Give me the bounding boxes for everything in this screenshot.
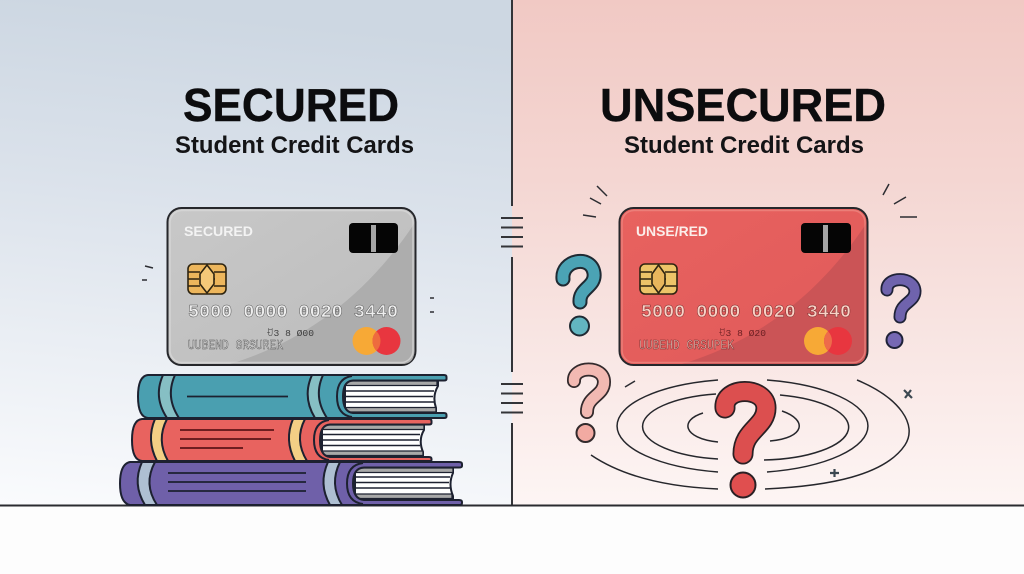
icon: pink question mark [574,370,604,442]
ground line [0,504,1024,506]
book stack [120,375,462,505]
heading: unsecured: UNSECURED [600,79,886,131]
card number: 5000 0000 0020 3440 [641,303,851,323]
heading: unsecured [600,79,886,159]
cardholder: UUBEND GRSUREK [188,338,283,354]
card number: 5000 0000 0020 3440 [188,303,398,323]
unsecured side motion ticks [583,184,917,387]
card shine [230,224,414,364]
heading: secured: Student Credit Cards [175,132,414,159]
panel: secured background [0,0,512,505]
book: teal [138,375,446,418]
magnetic block [349,223,398,253]
heading: secured [175,79,414,159]
expiry: ꀀ3 8 Ø20 [718,327,766,339]
expiry: ꀀ3 8 Ø00 [266,327,314,339]
cardholder: UUBEHD GRSUPEK [639,338,734,354]
secured credit card [168,208,416,365]
book: red [132,419,432,461]
network logo [352,327,400,355]
card shine [682,224,866,364]
center divider [501,0,523,505]
sparkles [830,390,912,477]
card label: SECURED [184,223,253,239]
panel: unsecured background [512,0,1024,505]
icon: purple question mark [886,280,915,348]
network logo [804,327,852,355]
icon: large red question mark [725,392,766,498]
chip [188,264,226,294]
book: purple [120,462,462,505]
heading: secured: SECURED [183,79,399,131]
icon: teal question mark [563,261,594,336]
footer strip [0,506,1024,574]
magnetic block [801,223,851,253]
card label: UNSE/RED [636,223,708,239]
heading: unsecured: Student Credit Cards [624,132,864,159]
secured side motion ticks [142,266,434,312]
chip [640,264,677,294]
concentric rings [591,380,909,489]
unsecured credit card [620,208,868,365]
